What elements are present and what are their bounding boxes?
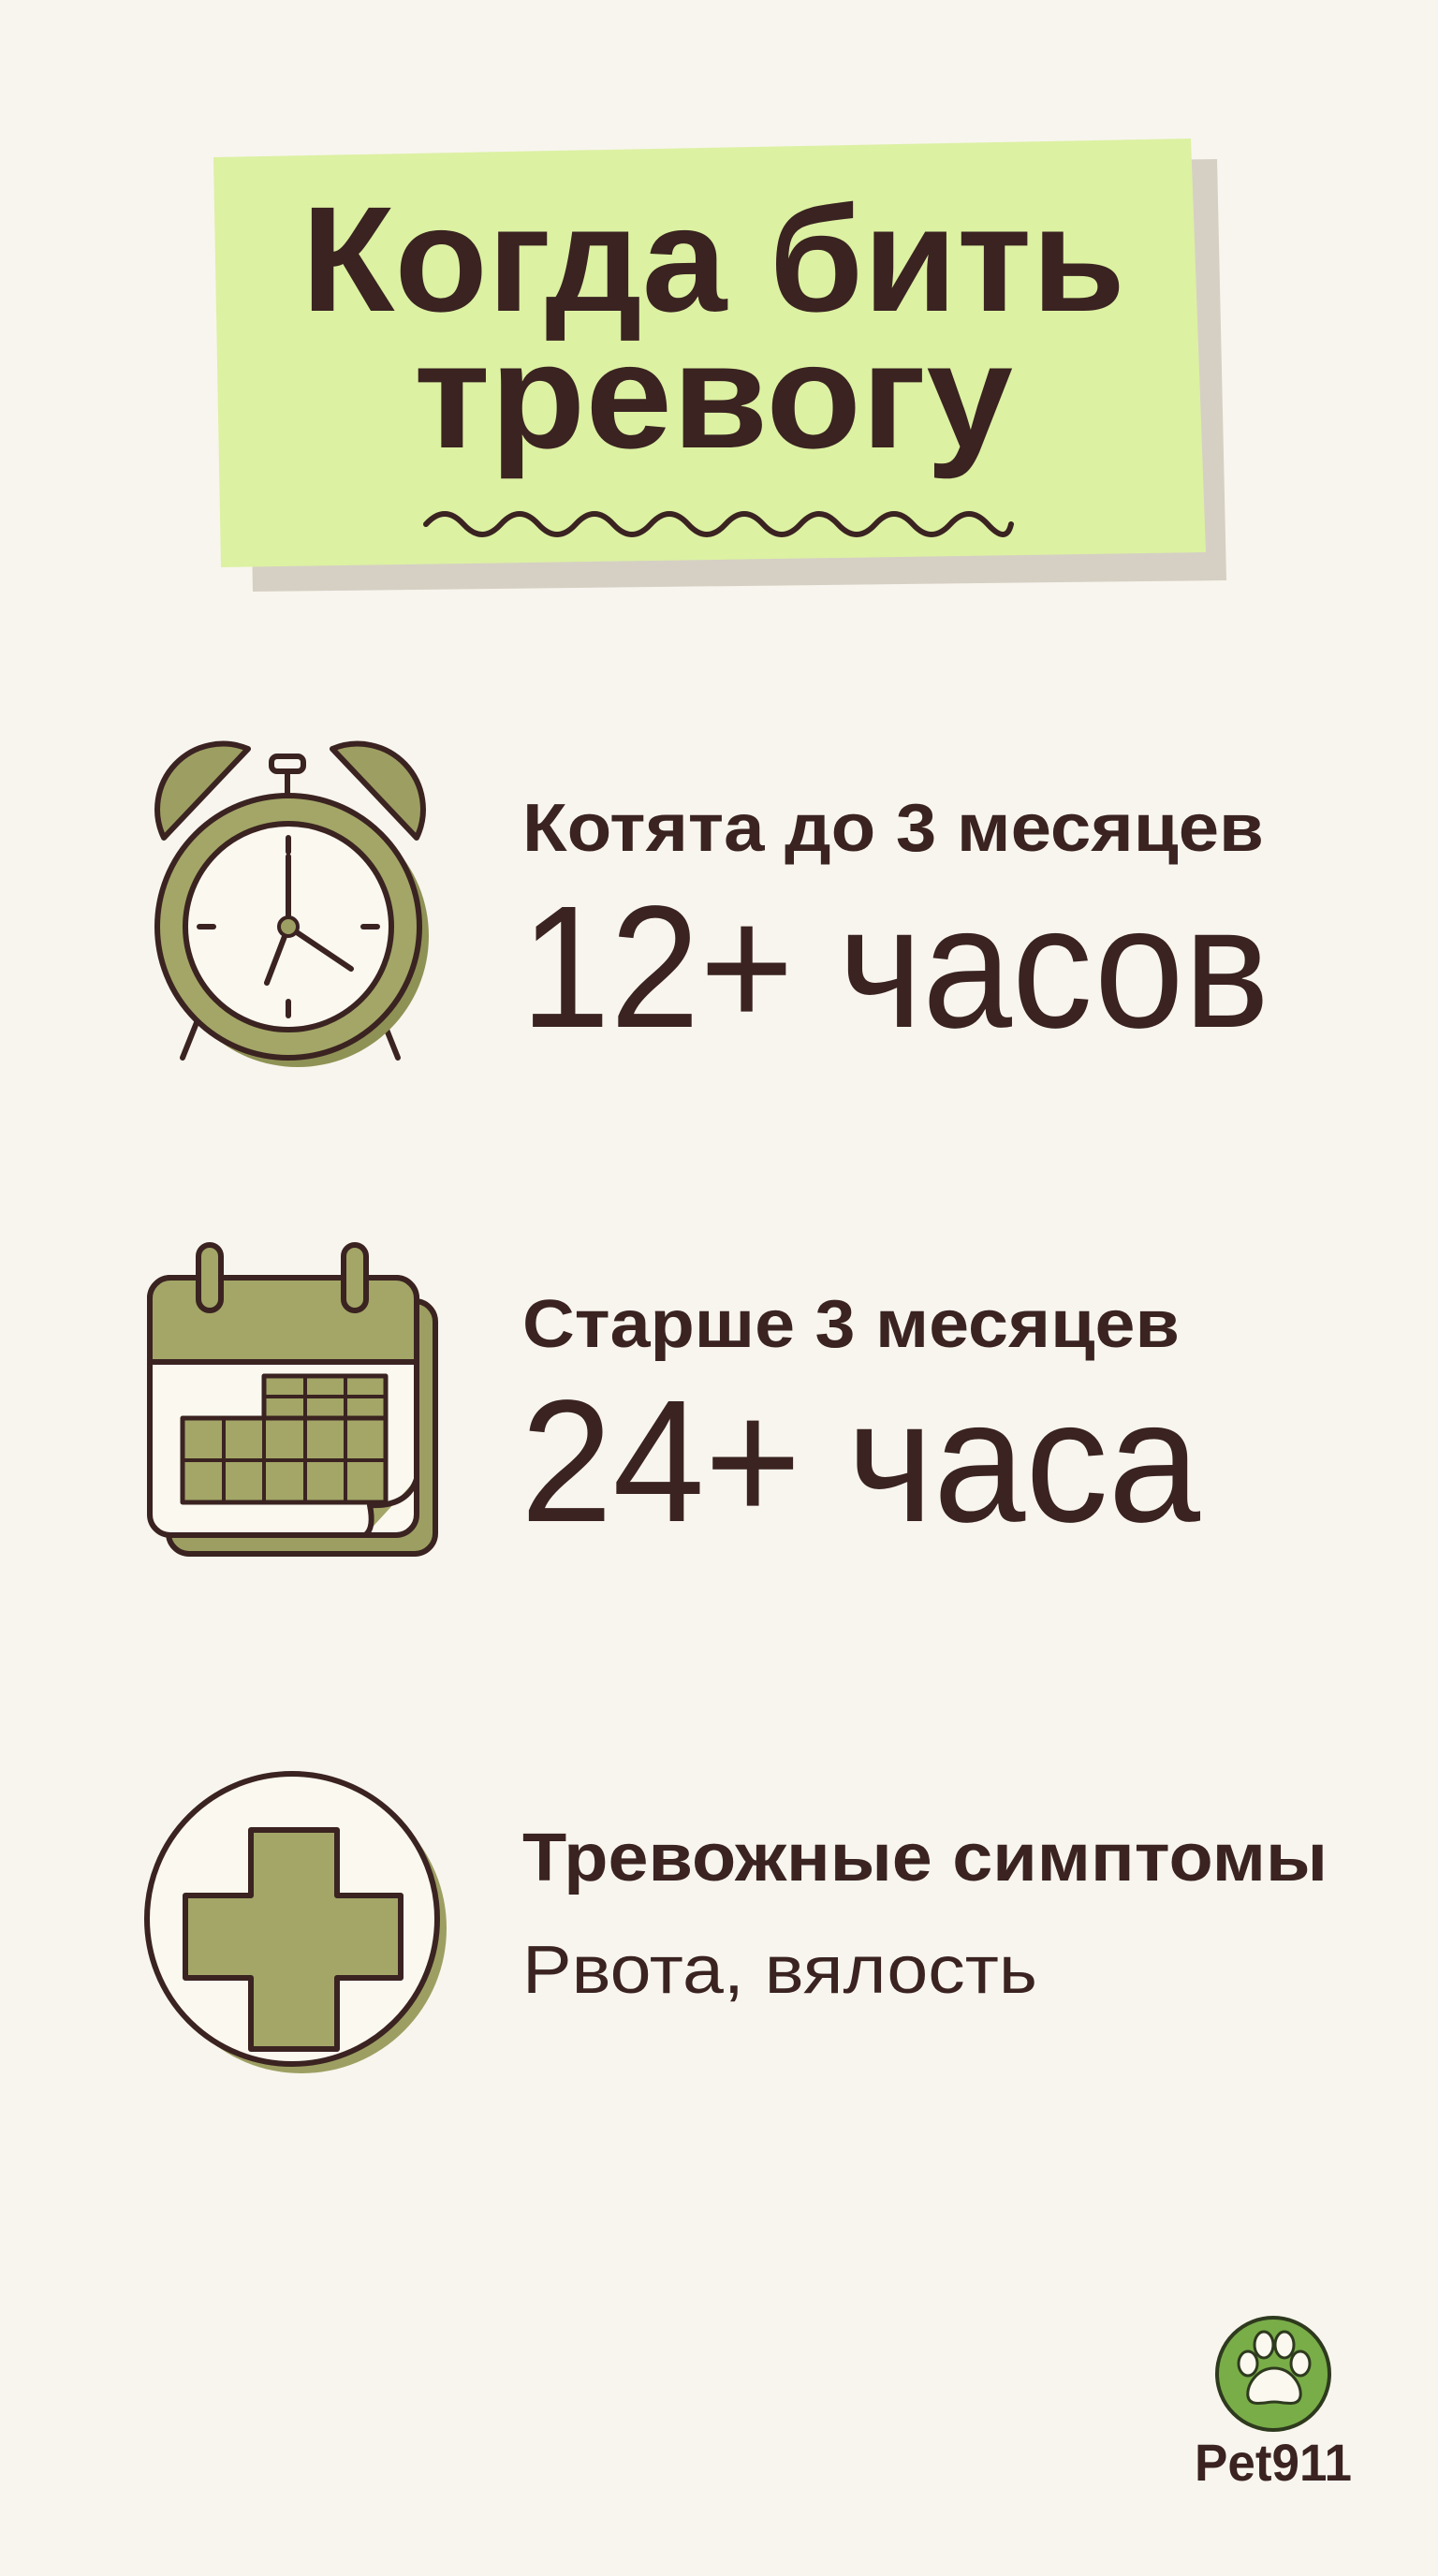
text block: symptoms	[522, 1821, 1328, 2008]
text block: kittens: 12+ часов	[521, 871, 1269, 1064]
text block: symptoms: Рвота, вялость	[522, 1933, 1037, 2008]
icon: calendar	[150, 1245, 435, 1554]
icon: medical cross	[147, 1774, 447, 2073]
text block: older: 24+ часа	[521, 1365, 1201, 1559]
icon: alarm clock	[157, 744, 429, 1067]
wavy underline	[426, 514, 1011, 534]
text block: kittens	[521, 791, 1269, 1064]
text block: older: Старше 3 месяцев	[522, 1287, 1180, 1362]
title	[301, 175, 1125, 479]
text block: kittens: Котята до 3 месяцев	[522, 791, 1264, 866]
title: Когда бить	[301, 175, 1125, 343]
title note	[213, 139, 1226, 592]
title: тревогу	[414, 312, 1013, 479]
logo: Pet911: Pet911	[1195, 2433, 1352, 2492]
logo: Pet911	[1195, 2318, 1352, 2492]
text block: symptoms: Тревожные симптомы	[522, 1821, 1328, 1895]
text block: older	[521, 1287, 1201, 1559]
